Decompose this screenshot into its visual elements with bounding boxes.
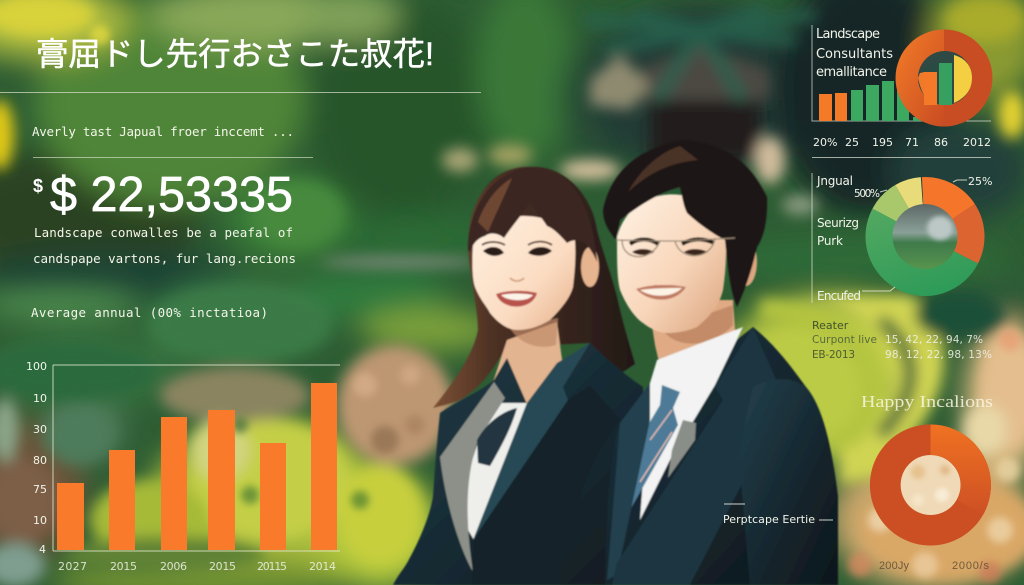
axis numbers <box>813 136 991 149</box>
big figure: $ 22,53335 <box>50 168 293 222</box>
people: two smiling young consultants <box>393 140 838 585</box>
bar chart y axis labels: 10 <box>33 514 47 527</box>
subtitle: Averly tast Japual froer inccemt ... <box>32 124 294 139</box>
ring chart year labels: 200Jy <box>879 560 910 572</box>
small data table: Reater <box>812 319 849 332</box>
small data table: Curpont live <box>812 334 877 346</box>
donut chart <box>861 173 989 300</box>
description text: Landscape conwalles be a peafal of <box>34 225 293 240</box>
ring chart year labels: 2000/s <box>952 560 990 572</box>
panel labels <box>816 27 893 80</box>
donut labels and leaders: Encufed <box>817 289 861 303</box>
panel labels: Landscape <box>816 27 880 42</box>
small data table <box>812 319 992 361</box>
bar chart x axis labels: 20115 <box>257 560 287 573</box>
donut chart panel <box>812 173 992 303</box>
top right panel: bars with ring <box>812 25 992 149</box>
small data table: EB-2013 <box>812 349 855 361</box>
bar chart y axis labels: 10 <box>33 392 47 405</box>
bar chart x axis labels: 2027 <box>58 560 87 573</box>
ring chart year labels <box>879 560 990 572</box>
small data table: 15, 42, 22, 94, 7% <box>885 334 983 346</box>
bar chart y axis labels: 100 <box>26 360 47 373</box>
title: 膏屈ドし先行おさこた叔花! <box>36 36 434 72</box>
panel labels: emallitance <box>816 65 887 80</box>
green and orange bars <box>819 81 923 121</box>
orange ring chart <box>870 424 991 545</box>
donut labels and leaders: 25% <box>968 175 992 188</box>
bar chart y axis labels: 75 <box>33 483 47 496</box>
bar chart <box>26 360 340 573</box>
bar chart x axis labels: 2015 <box>209 560 236 573</box>
man <box>603 140 838 585</box>
axis numbers: 86 <box>934 136 948 149</box>
bar chart y axis labels: 30 <box>33 423 47 436</box>
jacket callout: Perptcape Eertie <box>723 513 815 526</box>
woman <box>393 167 643 585</box>
small data table: 98, 12, 22, 98, 13% <box>885 349 992 361</box>
axis numbers: 2012 <box>963 136 991 149</box>
bar chart heading: Average annual (00% inctatioa) <box>31 305 268 320</box>
bar chart y axis labels <box>26 360 47 556</box>
donut labels and leaders <box>816 174 992 303</box>
donut labels and leaders: Purk <box>817 234 843 248</box>
donut labels and leaders: 500% <box>854 188 880 200</box>
donut labels and leaders: Seurizg <box>817 216 859 230</box>
bar chart x axis labels: 2015 <box>110 560 137 573</box>
bar chart x axis labels: 2014 <box>309 560 336 573</box>
description text <box>33 225 296 266</box>
ring chart <box>896 30 992 126</box>
bar chart y axis labels: 80 <box>33 454 47 467</box>
description text: candspape vartons, fur lang.recions <box>33 251 296 266</box>
bar chart x axis labels <box>58 560 336 573</box>
donut labels and leaders: Jngual <box>816 174 853 188</box>
jacket callout <box>723 504 833 526</box>
bar chart x axis labels: 2006 <box>160 560 187 573</box>
panel labels: Consultants <box>816 47 893 62</box>
axis numbers: 25 <box>845 136 859 149</box>
big figure: $ <box>33 176 43 196</box>
axis numbers: 195 <box>872 136 893 149</box>
axis numbers: 71 <box>905 136 919 149</box>
heading: happy incalions: Happy Incalions <box>861 392 993 411</box>
bar chart y axis labels: 4 <box>39 543 46 556</box>
axis numbers: 20% <box>813 136 837 149</box>
